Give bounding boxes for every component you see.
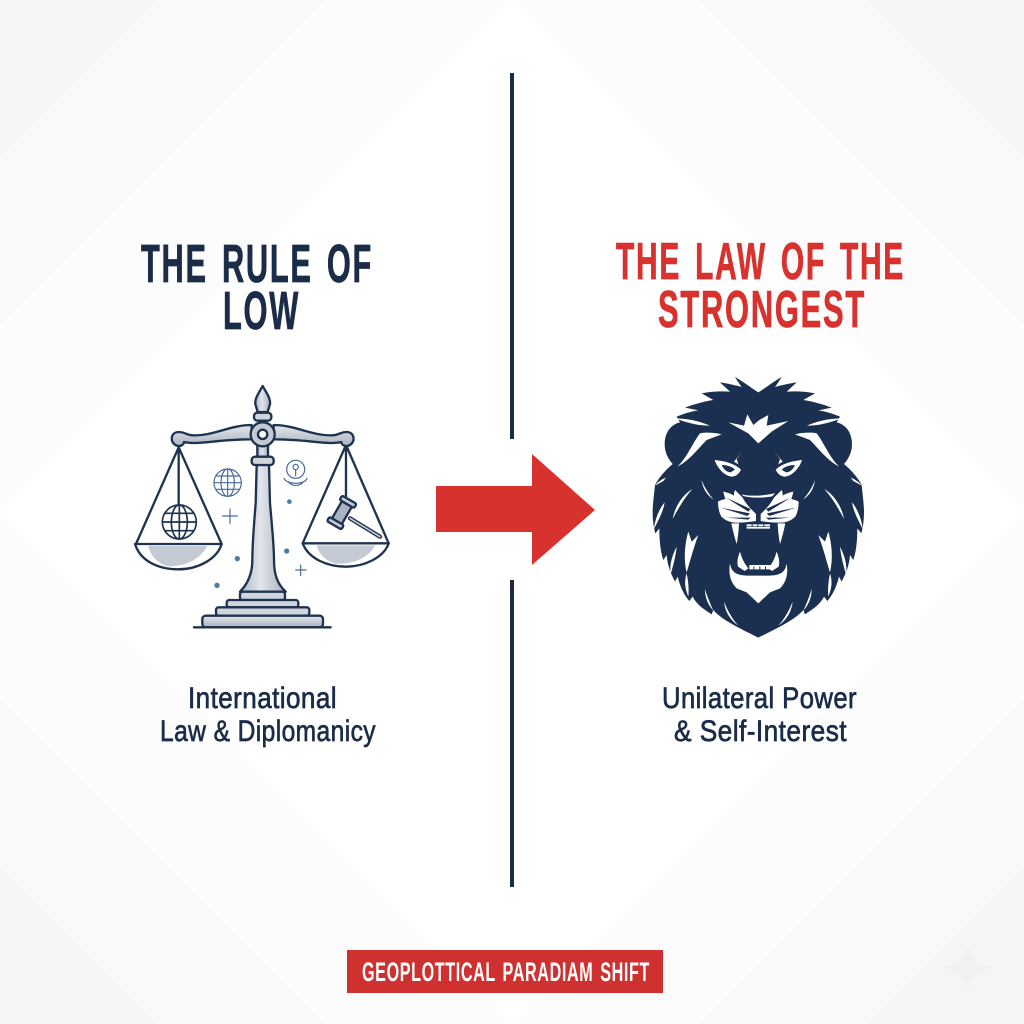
icon: small globe bbox=[214, 469, 241, 496]
right caption: & Self-Interest bbox=[674, 715, 847, 748]
icon: lion head bbox=[653, 377, 864, 638]
nose highlight bbox=[742, 493, 775, 499]
face dark details bbox=[721, 465, 796, 569]
divider: upper line bbox=[510, 73, 514, 439]
face markings bbox=[654, 414, 863, 626]
divider: lower line bbox=[510, 580, 514, 887]
left caption bbox=[160, 682, 376, 748]
right side markings bbox=[761, 418, 863, 626]
mane silhouette bbox=[653, 377, 864, 638]
sparkles and dots bbox=[214, 499, 306, 588]
left heading bbox=[141, 234, 373, 341]
left heading: LOW bbox=[223, 281, 300, 341]
right heading: STRONGEST bbox=[658, 281, 866, 339]
left pan bbox=[135, 544, 222, 569]
right pan strings bbox=[303, 445, 389, 543]
right caption: Unilateral Power bbox=[662, 682, 857, 715]
teeth bbox=[747, 524, 770, 529]
icon: gavel bbox=[327, 496, 380, 537]
beard bbox=[729, 563, 787, 603]
icon: left pan globe bbox=[162, 505, 196, 539]
right caption bbox=[662, 682, 857, 748]
icon: scales of justice bbox=[135, 386, 389, 627]
left heading: THE RULE OF bbox=[141, 234, 373, 294]
upper fang bbox=[778, 523, 785, 544]
right heading bbox=[616, 233, 905, 339]
muzzle bbox=[761, 490, 799, 523]
left caption: Law & Diplomanicy bbox=[160, 715, 376, 748]
right pan bbox=[303, 543, 389, 567]
left pan strings bbox=[136, 447, 222, 544]
forehead tuft bbox=[728, 414, 788, 443]
lower fang bbox=[768, 552, 779, 571]
icon: corner sparkle bbox=[944, 944, 992, 992]
footer label: GEOPLOTTICAL PARADIAM SHIFT bbox=[362, 957, 650, 987]
footer label bbox=[347, 950, 663, 993]
icon: pin badge bbox=[284, 460, 307, 485]
arrow bbox=[436, 454, 595, 565]
left caption: International bbox=[188, 682, 337, 715]
column and base bbox=[194, 386, 331, 627]
beam bbox=[172, 425, 354, 446]
